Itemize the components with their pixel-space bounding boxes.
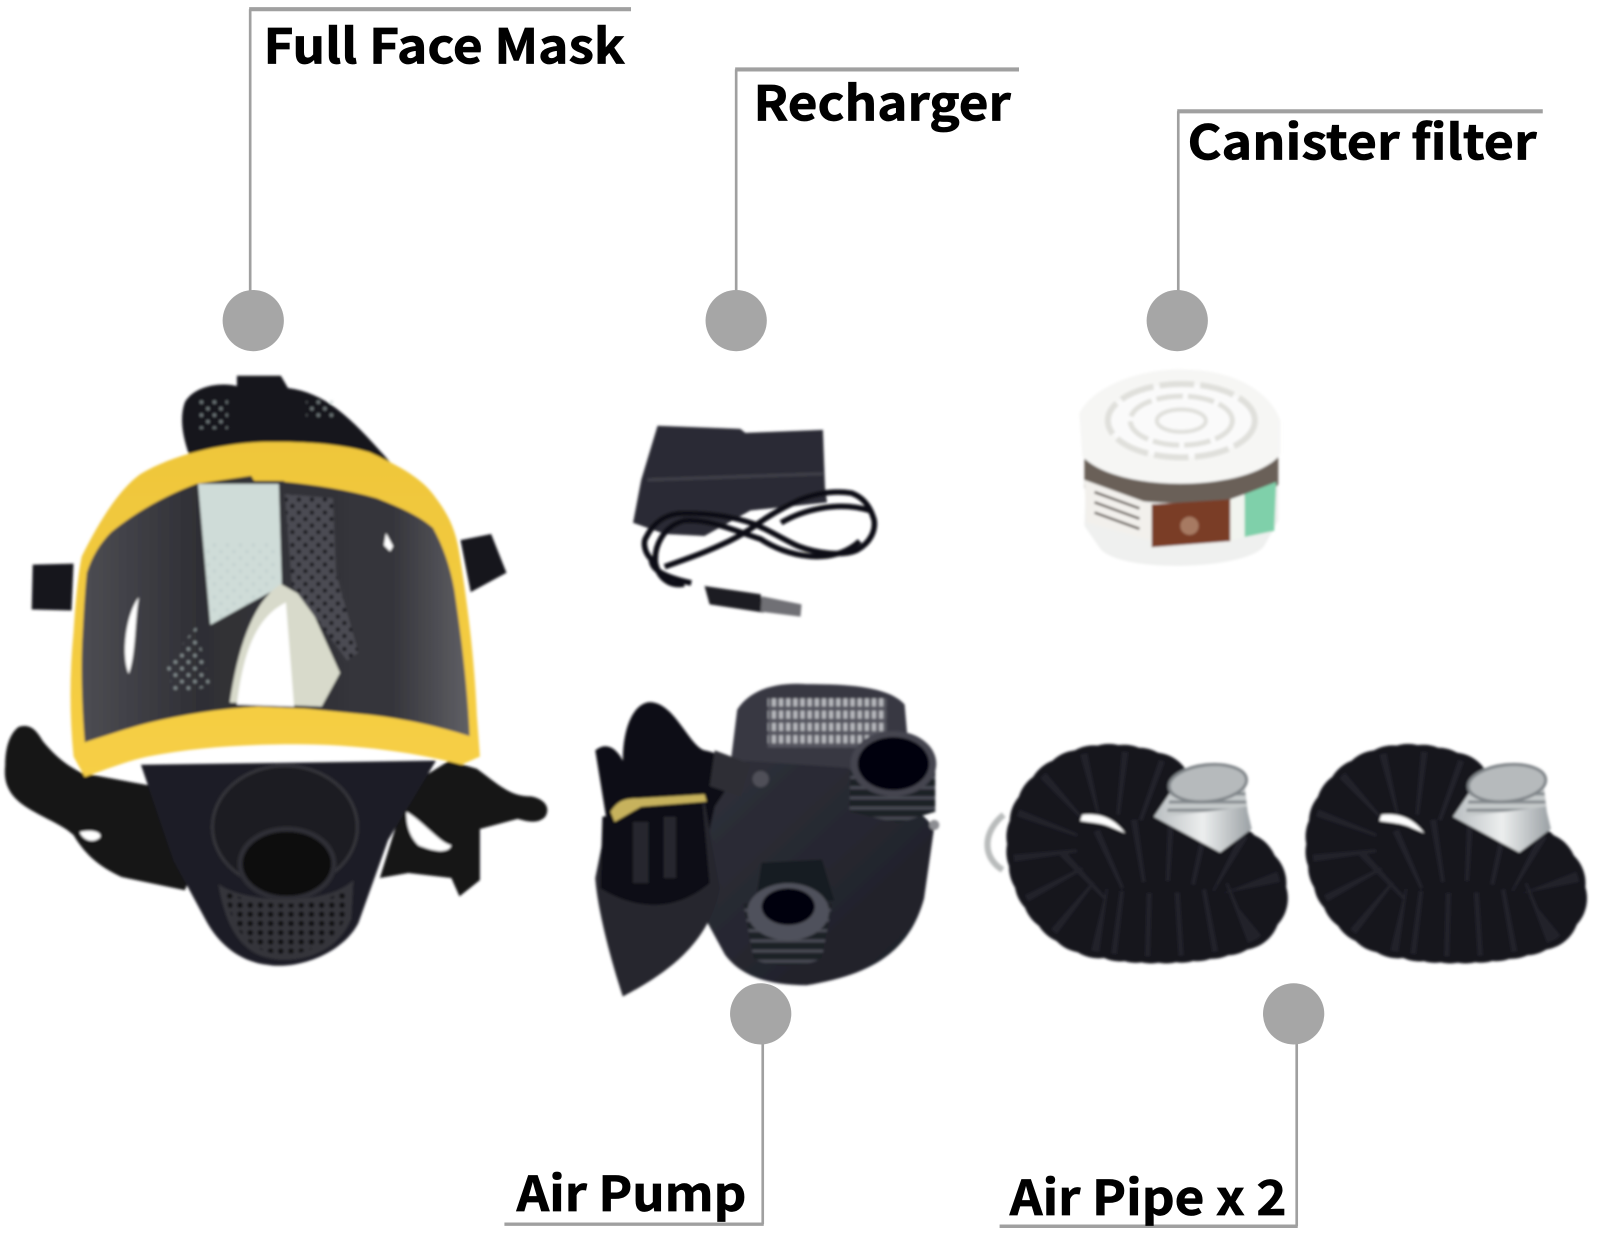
product: air pipe 2 [1344, 761, 1551, 925]
visor glass [82, 476, 470, 742]
white gap in coil [1080, 814, 1125, 833]
hose coil [1344, 783, 1453, 921]
metal connector [1453, 778, 1551, 853]
marker dot: Air Pump [730, 983, 791, 1044]
side clip right [461, 534, 506, 592]
left mesh seen through visor [166, 627, 210, 694]
side lug [929, 820, 939, 830]
lower port [743, 904, 832, 965]
right mesh seen through visor [285, 494, 358, 661]
label: Recharger: Recharger [754, 64, 1011, 134]
product: canister filter [1079, 369, 1280, 566]
callout: Full Face Mask [223, 7, 631, 351]
head harness top [182, 376, 392, 490]
dark rim under cap [1084, 449, 1278, 503]
callout: Recharger [706, 64, 1019, 351]
lower port nut [756, 860, 834, 904]
cap vents [1108, 384, 1255, 457]
port opening [240, 829, 334, 898]
label: Canister filter: Canister filter [1187, 103, 1537, 173]
right straps [380, 761, 547, 896]
leader line: Recharger [735, 69, 1019, 301]
product: air pipe 1 [987, 761, 1252, 925]
leader line: Air Pump [504, 1036, 764, 1224]
cable coil [644, 492, 874, 585]
marker dot: Canister filter [1147, 290, 1208, 351]
left straps [5, 726, 194, 890]
callout: Air Pipe x 2 [1000, 983, 1324, 1229]
metal ring behind hose [987, 815, 1004, 870]
strap clip and screw [710, 750, 750, 796]
nose cup highlight [230, 584, 340, 707]
strap bundle [595, 702, 745, 858]
hose ribs [1045, 783, 1250, 925]
glare on visor [125, 597, 139, 674]
metal connector [1154, 778, 1252, 853]
pouch [595, 801, 720, 996]
hose ribs [1344, 783, 1549, 925]
product: recharger [633, 426, 874, 617]
marker dot: Air Pipe x 2 [1263, 983, 1324, 1044]
white gap in coil [1379, 814, 1424, 833]
marker dot: Recharger [706, 290, 767, 351]
callout: Air Pump [504, 983, 791, 1225]
left white label [1084, 480, 1152, 541]
top label cap [729, 684, 911, 776]
marker dot: Full Face Mask [223, 290, 284, 351]
product: full face mask [5, 376, 547, 966]
main body [694, 761, 934, 985]
product: air pump [595, 684, 939, 996]
power adapter [633, 426, 827, 536]
side clip left [32, 564, 74, 611]
perforated grille [219, 880, 353, 960]
label: Air Pipe x 2: Air Pipe x 2 [1009, 1159, 1286, 1229]
label: Full Face Mask: Full Face Mask [263, 7, 625, 77]
reflection stripe [198, 484, 282, 625]
DC plug [705, 586, 764, 613]
green label [1230, 494, 1245, 541]
hose coil [1045, 783, 1154, 921]
label: Air Pump: Air Pump [516, 1155, 746, 1225]
rubber band [611, 794, 707, 822]
clear base and body [1084, 470, 1278, 566]
callout: Canister filter [1147, 103, 1543, 351]
printed label text block [768, 698, 886, 747]
brown label [1152, 499, 1230, 547]
leader line: Full Face Mask [249, 9, 631, 301]
lower face piece [141, 761, 436, 966]
upper threaded port [850, 761, 935, 823]
white cap [1079, 369, 1280, 484]
leader line: Canister filter [1177, 111, 1543, 301]
yellow frame [70, 442, 480, 777]
exhale port ring [212, 766, 357, 888]
leader line: Air Pipe x 2 [1000, 1036, 1298, 1226]
